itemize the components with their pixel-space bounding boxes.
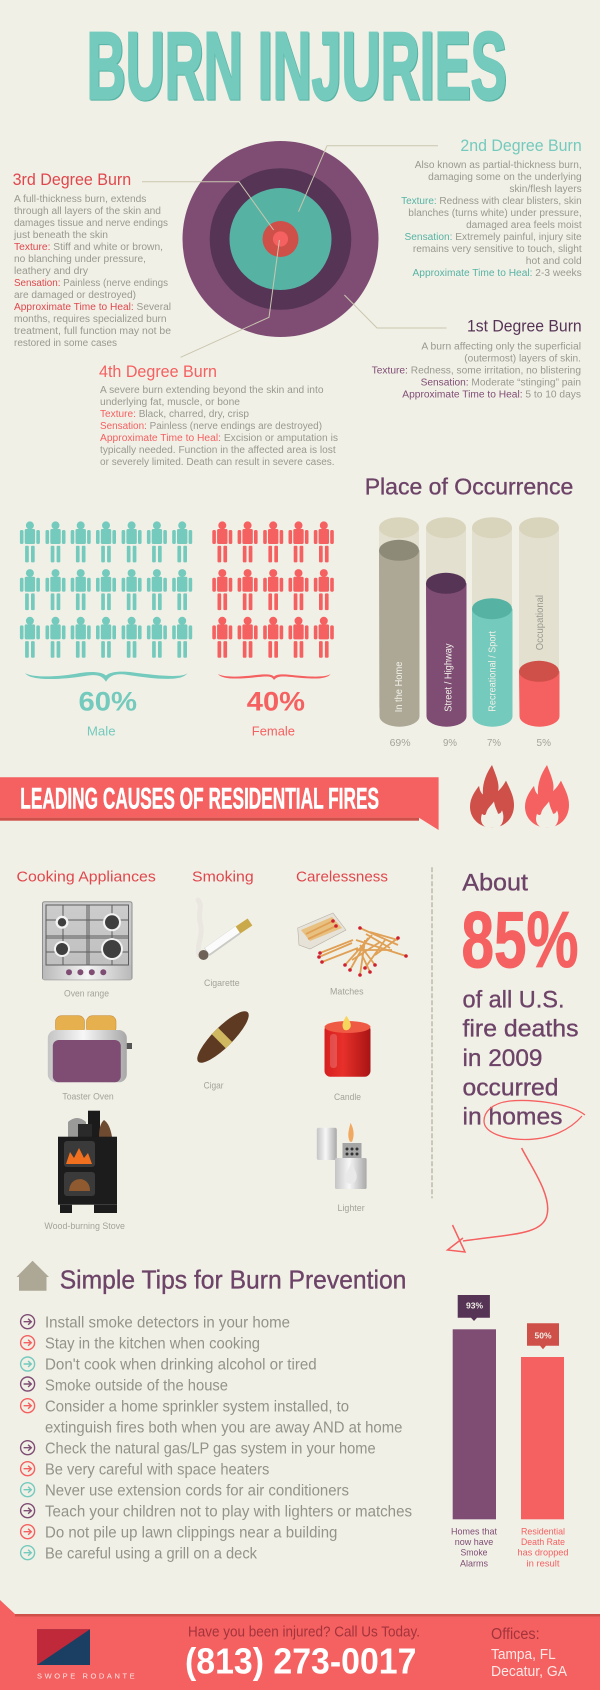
text block: 3rd degree burn: just beneath the skin xyxy=(13,230,108,241)
cylinder: recreational / sport 7%: Recreational / Sport xyxy=(488,631,498,712)
tip lines: Never use extension cords for air conditioners xyxy=(45,1482,349,1499)
stat: male 60%: 60% xyxy=(78,687,137,717)
brace: male xyxy=(25,672,188,682)
text block: 3rd degree burn: Texture: Stiff and white or brown, xyxy=(14,242,163,253)
tip lines: Install smoke detectors in your home xyxy=(45,1314,290,1331)
label: toaster oven: Toaster Oven xyxy=(62,1091,114,1101)
cylinder: in the home 69%: In the Home xyxy=(394,661,405,712)
text block: 3rd degree burn xyxy=(13,170,171,349)
text block: 3rd degree burn: Sensation: Painless (nerve endings xyxy=(14,278,168,289)
icon: wood-burning stove xyxy=(58,1111,117,1213)
text block: 4th degree burn xyxy=(99,362,338,468)
text block: 3rd degree burn: restored in some cases xyxy=(14,338,117,349)
text block: 2nd degree burn: Sensation: Extremely painful, injury site xyxy=(404,232,582,243)
hand-drawn circle around homes xyxy=(484,1101,585,1140)
cylinder: occupational 5%: Occupational xyxy=(535,595,546,650)
callout: 85 percent of fire deaths: in 2009 xyxy=(462,1045,542,1072)
cylinder: street / highway 9% xyxy=(426,517,466,727)
cylinder: recreational / sport 7% xyxy=(472,517,512,727)
text block: 4th degree burn: 4th Degree Burn xyxy=(99,362,217,381)
pictogram: female figures xyxy=(212,521,334,658)
bar chart: smoke alarms 93%: Homes that xyxy=(451,1526,497,1537)
logo: swope rodante xyxy=(37,1629,135,1681)
bar chart: smoke alarms 93%: now have xyxy=(455,1537,493,1548)
cylinder values: 9% xyxy=(443,737,457,749)
hand-drawn arrow xyxy=(448,1148,548,1252)
text block: 3rd degree burn: treatment, full function may not be xyxy=(14,326,171,337)
text block: 1st degree burn: 1st Degree Burn xyxy=(467,317,582,336)
icon: toaster oven xyxy=(48,1016,132,1082)
text block: 3rd degree burn: are damaged or destroyed) xyxy=(14,290,136,301)
text block: 3rd degree burn: 3rd Degree Burn xyxy=(13,170,131,189)
heading: cooking appliances: Cooking Appliances xyxy=(16,869,156,886)
cylinder values: 7% xyxy=(487,737,501,749)
stat: female 40%: Female xyxy=(252,723,295,738)
cylinder: street / highway 9%: Street / Highway xyxy=(443,643,454,712)
tip lines xyxy=(45,1314,412,1562)
label: matches: Matches xyxy=(330,987,364,997)
text block: 1st degree burn: Sensation: Moderate “stinging” pain xyxy=(421,377,581,388)
heading: simple tips for burn prevention: Simple Tips for Burn Prevention xyxy=(60,1265,406,1295)
text block: 2nd degree burn: remains very sensitive to touch, slight xyxy=(413,244,582,255)
cylinder values: 5% xyxy=(536,737,551,749)
label: candle: Candle xyxy=(334,1092,361,1102)
callout: 85 percent of fire deaths: occurred xyxy=(462,1074,558,1101)
icon: house xyxy=(16,1261,49,1291)
callout: 85 percent of fire deaths xyxy=(462,870,578,1131)
tip lines: Be careful using a grill on a deck xyxy=(45,1545,257,1562)
icon: cigarette xyxy=(198,900,250,960)
brace: female xyxy=(218,674,331,680)
text block: 4th degree burn: or severely limited. Death can result in severe cases. xyxy=(100,457,335,468)
tip bullets xyxy=(21,1315,35,1560)
icon: flame light xyxy=(525,765,569,828)
tip lines: extinguish fires both when you are away AND at home xyxy=(45,1419,402,1436)
text block: 3rd degree burn: leathery and dry xyxy=(14,266,88,277)
bar chart: death rate 50%: in result xyxy=(526,1559,560,1570)
text block: 1st degree burn: Approximate Time to Heal: 5 to 10 days xyxy=(402,389,581,400)
callout: 85 percent of fire deaths: in homes xyxy=(462,1104,562,1131)
cylinder: occupational 5% xyxy=(519,517,560,727)
label: cigar: Cigar xyxy=(204,1081,224,1091)
bar chart: smoke alarms 93% xyxy=(451,1295,497,1570)
cylinder values xyxy=(390,737,551,749)
label: oven range: Oven range xyxy=(64,989,109,999)
text block: 4th degree burn: A severe burn extending beyond the skin and into xyxy=(100,385,324,396)
icon: oven range xyxy=(42,902,132,980)
text block: 4th degree burn: Texture: Black, charred, dry, crisp xyxy=(100,409,249,420)
text block: 2nd degree burn: 2nd Degree Burn xyxy=(460,136,582,155)
list: prevention tips xyxy=(21,1314,412,1562)
text block: 2nd degree burn xyxy=(401,136,582,279)
text block: 2nd degree burn: damaging some on the underlying xyxy=(428,172,582,183)
divider xyxy=(431,867,433,1198)
heading: carelessness: Carelessness xyxy=(296,869,388,886)
stat: female 40% xyxy=(247,687,305,738)
text block: 3rd degree burn: Approximate Time to Heal: Several xyxy=(14,302,171,313)
bar chart: death rate 50%: 50% xyxy=(534,1330,552,1340)
tip lines: Don't cook when drinking alcohol or tired xyxy=(45,1356,317,1373)
text block: 2nd degree burn: Texture: Redness with clear blisters, skin xyxy=(401,196,582,207)
icon: cigar xyxy=(191,1005,255,1069)
leader lines xyxy=(142,146,447,357)
text block: 4th degree burn: Sensation: Painless (nerve endings are destroyed) xyxy=(100,421,322,432)
tip lines: Be very careful with space heaters xyxy=(45,1461,270,1478)
text block: 1st degree burn: A burn affecting only the superficial xyxy=(421,341,581,352)
icon: lighter xyxy=(317,1123,367,1189)
stat: female 40%: 40% xyxy=(247,687,305,717)
callout: 85 percent of fire deaths: fire deaths xyxy=(462,1016,578,1043)
cylinder chart: place of occurrence xyxy=(379,517,560,749)
text block: 3rd degree burn: A full-thickness burn, extends xyxy=(14,194,146,205)
text block: 2nd degree burn: blanches (turns white) under pressure, xyxy=(408,208,582,219)
text block: 1st degree burn: Texture: Redness, some irritation, no blistering xyxy=(372,365,581,376)
tip lines: Smoke outside of the house xyxy=(45,1377,228,1394)
text block: 4th degree burn: Approximate Time to Heal: Excision or amputation is xyxy=(100,433,338,444)
text block: 2nd degree burn: damaged area feels moist xyxy=(466,220,582,231)
text block: 2nd degree burn: Also known as partial-thickness burn, xyxy=(415,160,582,171)
call to action: Have you been injured? Call Us Today. xyxy=(188,1625,420,1641)
text block: 2nd degree burn: hot and cold xyxy=(526,256,582,267)
bar chart: smoke alarms 93%: Smoke xyxy=(460,1548,488,1559)
label: lighter: Lighter xyxy=(338,1203,365,1213)
label: wood-burning stove: Wood-burning Stove xyxy=(44,1221,125,1231)
cylinder values: 69% xyxy=(390,737,411,749)
burn depth target diagram xyxy=(182,141,378,337)
text block: 3rd degree burn: through all layers of the skin and xyxy=(14,206,161,217)
offices: Tampa, FL xyxy=(491,1646,556,1663)
label: cigarette: Cigarette xyxy=(204,978,240,988)
footer xyxy=(0,1600,600,1690)
bar chart: smoke alarms 93%: Alarms xyxy=(460,1559,488,1570)
text block: 3rd degree burn: months, requires specialized burn xyxy=(14,314,167,325)
tip lines: Stay in the kitchen when cooking xyxy=(45,1335,260,1352)
text block: 3rd degree burn: damages tissue and nerve endings xyxy=(14,218,168,229)
tip lines: Check the natural gas/LP gas system in your home xyxy=(45,1440,376,1457)
text block: 2nd degree burn: Approximate Time to Heal: 2-3 weeks xyxy=(413,268,582,279)
heading: place of occurrence: Place of Occurrence xyxy=(365,473,573,499)
tip lines: Consider a home sprinkler system installed, to xyxy=(45,1398,349,1415)
stat: male 60% xyxy=(78,687,137,738)
cylinder: in the home 69% xyxy=(379,517,420,727)
offices xyxy=(491,1626,567,1680)
pictogram: male figures xyxy=(20,521,192,658)
offices: Offices: xyxy=(491,1626,540,1643)
tip lines: Do not pile up lawn clippings near a building xyxy=(45,1524,337,1541)
text block: 2nd degree burn: skin/flesh layers xyxy=(509,184,582,195)
call to action: (813) 273-0017 xyxy=(185,1640,416,1681)
bar chart: death rate 50%: has dropped xyxy=(518,1548,568,1559)
bar chart: death rate 50%: Death Rate xyxy=(521,1537,565,1548)
bar chart: death rate 50%: Residential xyxy=(521,1526,565,1537)
icon: matches xyxy=(298,913,408,977)
icon: flame dark xyxy=(470,765,514,828)
offices: Decatur, GA xyxy=(491,1663,567,1680)
text block: 4th degree burn: typically needed. Function in the affected area is lost xyxy=(100,445,336,456)
callout: 85 percent of fire deaths: of all U.S. xyxy=(462,986,564,1013)
callout: 85 percent of fire deaths: About xyxy=(462,870,528,897)
text block: 4th degree burn: underlying fat, muscle, or bone xyxy=(100,397,240,408)
banner: leading causes of residential fires xyxy=(0,777,439,830)
bar chart: smoke alarms 93%: 93% xyxy=(466,1301,483,1311)
tip lines: Teach your children not to play with lighters or matches xyxy=(45,1503,412,1520)
icon: candle xyxy=(324,1016,370,1077)
logo: swope rodante: SWOPE RODANTE xyxy=(37,1672,135,1681)
text block: 1st degree burn: (outermost) layers of skin. xyxy=(464,353,581,364)
bar chart: death rate 50% xyxy=(518,1323,568,1570)
text block: 3rd degree burn: no blanching under pressure, xyxy=(14,254,146,265)
text block: 1st degree burn xyxy=(372,317,582,400)
stat: male 60%: Male xyxy=(87,723,116,738)
heading: smoking: Smoking xyxy=(192,869,254,886)
